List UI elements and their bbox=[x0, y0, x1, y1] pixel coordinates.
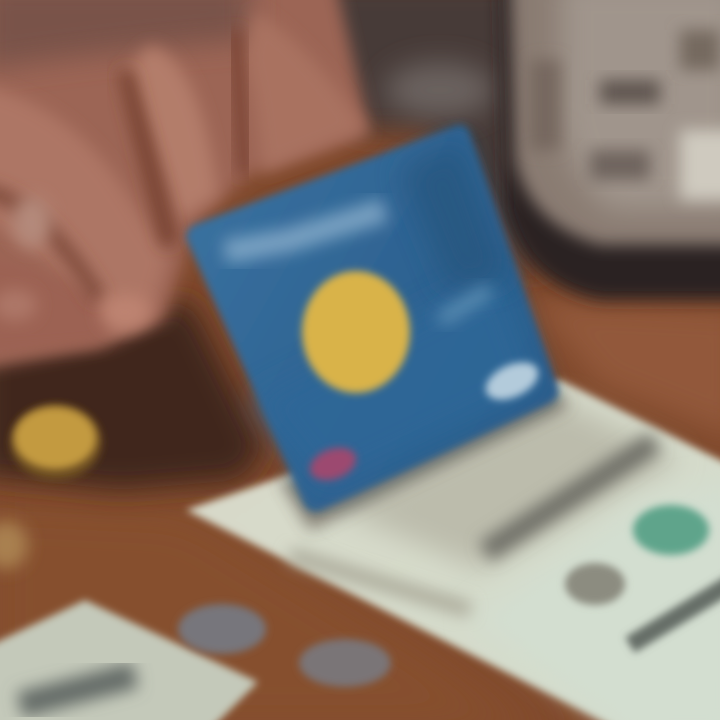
card logo white bbox=[480, 355, 544, 407]
card lower sheen bbox=[250, 270, 545, 495]
banknote left print band bbox=[290, 555, 470, 610]
card shadow bbox=[280, 380, 570, 530]
jar on the top right bbox=[500, 0, 720, 300]
card title lettering smear bbox=[225, 210, 385, 252]
credit card bbox=[186, 125, 570, 530]
banknote top grey tone bbox=[340, 400, 680, 570]
card body bbox=[186, 125, 558, 512]
coin on the left bbox=[10, 404, 102, 480]
yellow chip circle bbox=[302, 271, 410, 393]
paper note on the bottom left bbox=[0, 600, 258, 720]
silver coins bbox=[178, 604, 391, 687]
card pale detail lines bbox=[440, 290, 490, 320]
blurred coin at left edge bbox=[0, 521, 28, 569]
banknote lower print band bbox=[630, 578, 720, 645]
banknote teal seal bbox=[633, 505, 709, 555]
table lower left tone bbox=[0, 490, 560, 720]
banknote dark print band bbox=[485, 442, 655, 552]
table right side highlight bbox=[530, 300, 720, 440]
dark background behind hand and jar bbox=[300, 0, 540, 280]
banknote lower pale tone bbox=[470, 480, 720, 720]
dark shadow under the hand bbox=[0, 300, 265, 490]
card top right dark zone bbox=[400, 140, 510, 290]
banknote on the bottom right bbox=[186, 380, 720, 720]
card logo red bbox=[305, 442, 361, 486]
banknote grey seal bbox=[565, 563, 625, 605]
blurry grey object behind card bbox=[385, 62, 495, 118]
hand holding the card bbox=[0, 0, 370, 370]
